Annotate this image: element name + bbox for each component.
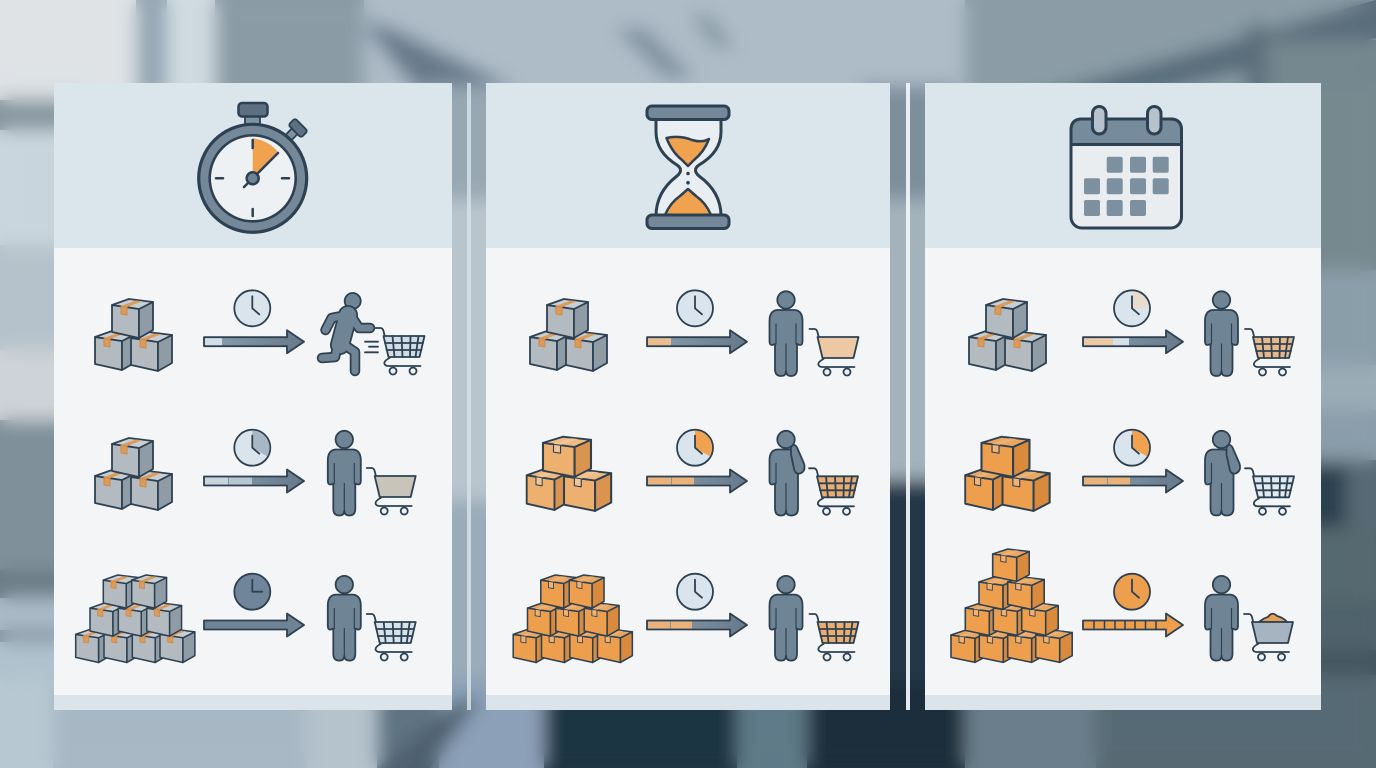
cart with heap of goods bbox=[1244, 614, 1293, 660]
clock bbox=[234, 430, 270, 466]
panel body bbox=[486, 248, 890, 695]
cart bbox=[1245, 329, 1294, 376]
clock bbox=[677, 430, 713, 466]
panel header bbox=[54, 83, 452, 248]
row 1: small stock, short wait, running shopper bbox=[95, 290, 424, 374]
clock bbox=[234, 290, 270, 326]
arrow bbox=[647, 330, 747, 353]
cart bbox=[376, 328, 424, 374]
row 1: small stock, short wait, browsing shopper bbox=[530, 290, 858, 376]
panel header bbox=[486, 83, 890, 248]
icon: calendar bbox=[1071, 106, 1182, 228]
boxes bbox=[969, 299, 1046, 371]
panel: hourglass column bbox=[486, 83, 890, 710]
speed lines bbox=[365, 342, 378, 352]
row 2: small stock, medium wait, standing shopper bbox=[95, 430, 416, 516]
cart bbox=[809, 468, 858, 515]
boxes bbox=[530, 299, 607, 371]
boxes bbox=[95, 299, 172, 371]
person bbox=[328, 431, 361, 516]
panel: calendar column bbox=[925, 83, 1321, 710]
divider bar: left bbox=[467, 83, 471, 710]
cart bbox=[810, 329, 858, 376]
panel footer bbox=[486, 695, 890, 710]
panel footer bbox=[54, 695, 452, 710]
person bbox=[770, 576, 802, 661]
cart bbox=[367, 468, 416, 514]
clock bbox=[234, 574, 270, 610]
row 3: very large stock, long wait, shopper with full cart bbox=[951, 549, 1293, 662]
boxes bbox=[965, 437, 1050, 511]
clock bbox=[1114, 574, 1150, 610]
row 2: medium stock, medium wait, thinking shopper bbox=[965, 430, 1294, 516]
clock bbox=[1114, 430, 1150, 466]
panel footer bbox=[925, 695, 1321, 710]
boxes bbox=[513, 575, 632, 662]
person bbox=[770, 291, 802, 376]
cart bbox=[1245, 468, 1294, 515]
icon: hourglass bbox=[647, 106, 729, 228]
clock bbox=[1114, 290, 1150, 326]
cart bbox=[810, 614, 858, 660]
boxes bbox=[951, 549, 1072, 662]
arrow bbox=[647, 470, 747, 492]
thinking person bbox=[770, 431, 804, 516]
boxes bbox=[95, 438, 172, 510]
person bbox=[1205, 576, 1238, 661]
panel header bbox=[925, 83, 1321, 248]
clock bbox=[677, 574, 713, 610]
running person bbox=[322, 293, 370, 371]
row 1: small stock, short wait, browsing shopper bbox=[969, 290, 1294, 376]
icon: stopwatch bbox=[199, 103, 308, 232]
clock bbox=[677, 290, 713, 326]
arrow bbox=[204, 470, 304, 492]
arrow bbox=[204, 614, 304, 636]
row 3: large stock, long wait, standing shopper bbox=[76, 574, 416, 662]
arrow bbox=[1083, 470, 1183, 492]
arrow bbox=[1083, 330, 1183, 353]
thinking person bbox=[1205, 431, 1240, 516]
boxes bbox=[76, 575, 195, 662]
arrow bbox=[204, 330, 304, 353]
person bbox=[1205, 291, 1238, 376]
panel: stopwatch column bbox=[54, 83, 452, 710]
panel body bbox=[54, 248, 452, 695]
arrow bbox=[647, 614, 747, 636]
arrow bbox=[1083, 614, 1183, 636]
boxes bbox=[527, 437, 611, 511]
panel body bbox=[925, 248, 1321, 695]
divider bar: right bbox=[906, 83, 910, 710]
row 3: large stock, medium wait, standing shopper bbox=[513, 574, 858, 662]
person bbox=[328, 576, 361, 661]
row 2: medium stock, medium wait, thinking shopper bbox=[527, 430, 858, 516]
cart bbox=[367, 614, 416, 660]
